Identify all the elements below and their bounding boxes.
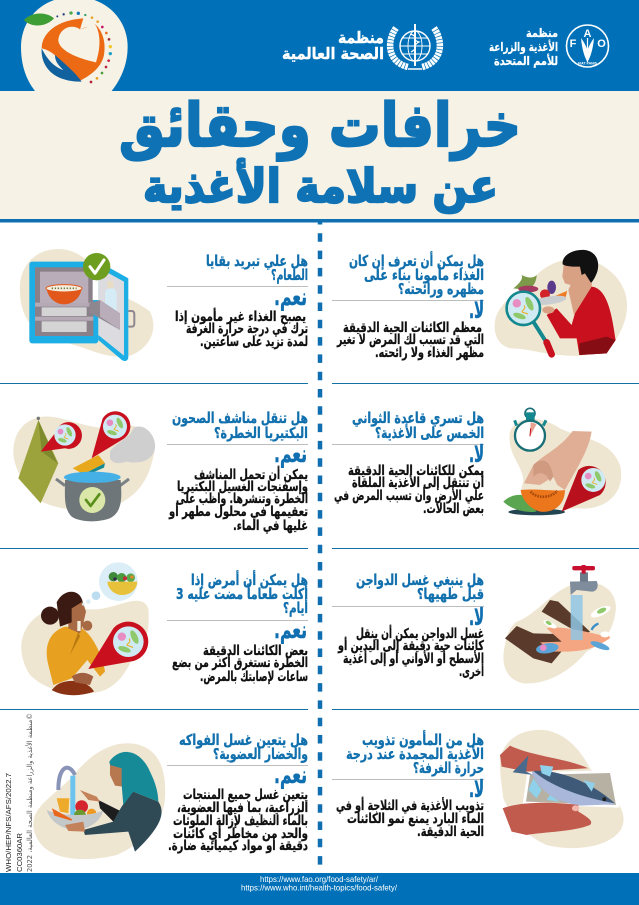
question: هل تنقل مناشف الصحون [172, 409, 308, 427]
explanation: يتعين غسل جميع المنتجات [183, 787, 308, 803]
illustration: hands washing poultry under tap [503, 565, 616, 683]
explanation: لمدة تزيد على ساعتين. [200, 334, 308, 350]
title: خرافات وحقائق [119, 91, 521, 161]
question [206, 252, 308, 284]
panel: defrosting [332, 730, 624, 848]
explanation: بعض الكائنات الدقيقة [203, 643, 308, 659]
text: WHO name [282, 28, 384, 63]
explanation [168, 787, 308, 854]
explanation: الأسطح أو الأواني أو إلى أغذية [343, 650, 484, 667]
explanation [172, 643, 308, 685]
explanation: دقيقة أو مواد كيميائية ضارة. [168, 837, 308, 854]
header band [0, 0, 639, 91]
link: WHO: https://www.who.int/health-topics/food-safety/ [241, 882, 398, 892]
explanation: ساعات لإصابتك بالمرض. [200, 669, 308, 685]
explanation: الماء البارد يمنع نمو الكائنات [347, 811, 484, 827]
question [346, 730, 484, 777]
question: هل يمكن أن أمرض إذا [191, 570, 308, 589]
text: FAO name [489, 26, 558, 68]
question: هل من المأمون تذويب [362, 730, 484, 749]
explanation: غسل الدواجن يمكن أن ينقل [356, 625, 484, 642]
credits: document code and copyright: WHO/HEP/NFS/AFS/2022.7 [6, 773, 13, 872]
explanation: يصبح الغذاء غير مأمون إذا [175, 308, 306, 325]
explanation: يمكن للكائنات الحية الدقيقة [348, 463, 484, 479]
answer: لا. [469, 296, 484, 324]
icon: FAO emblem: A [584, 28, 592, 40]
footer with links [0, 873, 639, 905]
explanation: بعض الحالات. [423, 501, 484, 517]
explanation: الخطرة وتنشرها. واظب على [176, 491, 308, 507]
title band [0, 91, 639, 222]
explanation: والحد من مخاطر أي كائنات [173, 825, 308, 842]
answer: نعم. [274, 761, 307, 789]
icon: WHO emblem [390, 24, 440, 69]
explanation: الحية الدقيقة. [417, 824, 484, 840]
icon: FAO emblem [566, 25, 608, 67]
question: البكتيريا الخطرة؟ [214, 424, 308, 442]
explanation: تعقيمها في محلول مطهر أو [168, 503, 308, 520]
explanation: التي قد تسبب لك المرض لا تغير [336, 332, 484, 348]
question: هل يتعين غسل الفواكه [179, 731, 308, 749]
link: FAO: https://www.fao.org/food-safety/ar/ [260, 874, 379, 884]
answer: نعم. [274, 440, 307, 468]
explanation [336, 797, 484, 840]
panel: food left three days [21, 562, 308, 695]
question [356, 571, 484, 603]
illustration: frozen fish tray held by hands [500, 730, 624, 848]
illustration: man smelling food with magnifier [495, 250, 627, 356]
question: قبل طهيها؟ [417, 585, 484, 603]
panel: appearance and smell [332, 250, 627, 361]
illustration: open refrigerator with check mark [20, 249, 153, 361]
panel: washing organic produce [33, 731, 308, 859]
panel: washing poultry [332, 565, 616, 683]
explanation [175, 308, 308, 350]
explanation: كائنات حية دقيقة إلى اليدين أو [337, 637, 484, 654]
explanation: الزراعية، بما فيها العضوية، [177, 800, 308, 816]
illustration: woman thinking about salad [21, 562, 149, 695]
question: والخضار العضوية؟ [213, 745, 308, 763]
panel: refrigerate leftovers [20, 249, 308, 361]
explanation [337, 625, 484, 680]
explanation: أخرى. [459, 663, 484, 680]
question: مظهره ورائحته؟ [398, 280, 484, 298]
question: الخمس على الأغذية؟ [375, 424, 484, 442]
explanation: بالماء النظيف لإزالة الملوثات [173, 813, 308, 829]
answer: لا. [469, 775, 484, 803]
explanation [336, 320, 484, 361]
question [349, 251, 484, 298]
text: FAO name: الأغذية والزراعة [489, 39, 558, 55]
explanation: أن تنتقل إلى الأغذية الملقاة [352, 474, 484, 491]
explanation [334, 463, 484, 517]
text: FAO name: منظمة [526, 26, 558, 40]
explanation: معظم الكائنات الحية الدقيقة [343, 320, 482, 336]
centre dashed divider [318, 219, 322, 873]
question: الغذاء مأمونا بناء على [364, 265, 484, 284]
question: أيام؟ [283, 598, 308, 617]
illustration: towel, sponge boiling in pot [13, 411, 155, 521]
credits: document code and copyright: ©منظمة الأغذية والزراعة ومنظمة الصحة العالمية، 2022 [25, 713, 34, 872]
question: هل ينبغي غسل الدواجن [356, 571, 484, 589]
panel: dish towels [13, 409, 308, 534]
illustration: woman washing fruit and vegetables [33, 743, 165, 859]
title [119, 91, 521, 213]
answer: نعم. [274, 616, 307, 644]
text: WHO name: منظمة [338, 28, 384, 47]
question [176, 570, 308, 617]
question: الأغذية المجمدة عند درجة [346, 745, 484, 763]
answer: نعم. [274, 283, 307, 311]
answer: لا. [469, 440, 484, 468]
question: الطعام؟ [271, 266, 308, 284]
credits: document code and copyright: CC0360AR [17, 833, 24, 872]
question: هل يمكن أن تعرف إن كان [349, 251, 484, 270]
explanation: ترك في درجة حرارة الغرفة [186, 321, 308, 337]
illustration: hand picking up dropped papaya, stopwatch [503, 408, 621, 515]
icon: FAO emblem: F [570, 38, 577, 50]
question: هل علي تبريد بقايا [206, 252, 308, 270]
icon: food safety logo [21, 0, 128, 91]
explanation: الخطرة تستغرق أكثر من بضع [172, 654, 308, 671]
explanation: مظهر الغذاء ولا رائحته. [375, 345, 484, 361]
explanation: وإسفنجات الغسيل البكتيريا [177, 479, 308, 495]
icon: FAO emblem: O [597, 38, 606, 50]
text: FAO name: للأمم المتحدة [494, 53, 558, 68]
explanation: غليها في الماء. [233, 518, 308, 534]
question: أكلت طعاماً مضت عليه 3 [176, 583, 308, 603]
question: حرارة الغرفة؟ [413, 759, 484, 777]
answer: لا. [469, 603, 484, 631]
question [172, 409, 308, 442]
explanation: يمكن أن تحمل المناشف [194, 466, 308, 483]
title: عن سلامة الأغذية [143, 158, 498, 213]
question [179, 731, 308, 763]
explanation: علي الأرض وأن تسبب المرض في [334, 487, 484, 504]
icon: FAO emblem: FIAT PANIS [578, 62, 598, 66]
explanation [168, 466, 308, 534]
credits: document code and copyright [6, 713, 34, 872]
explanation: تذويب الأغذية في الثلاجة أو في [336, 797, 484, 814]
question: هل تسري قاعدة الثواني [352, 409, 484, 428]
panel: five second rule [332, 408, 621, 517]
question [352, 409, 484, 442]
text: WHO name: الصحة العالمية [282, 44, 384, 63]
